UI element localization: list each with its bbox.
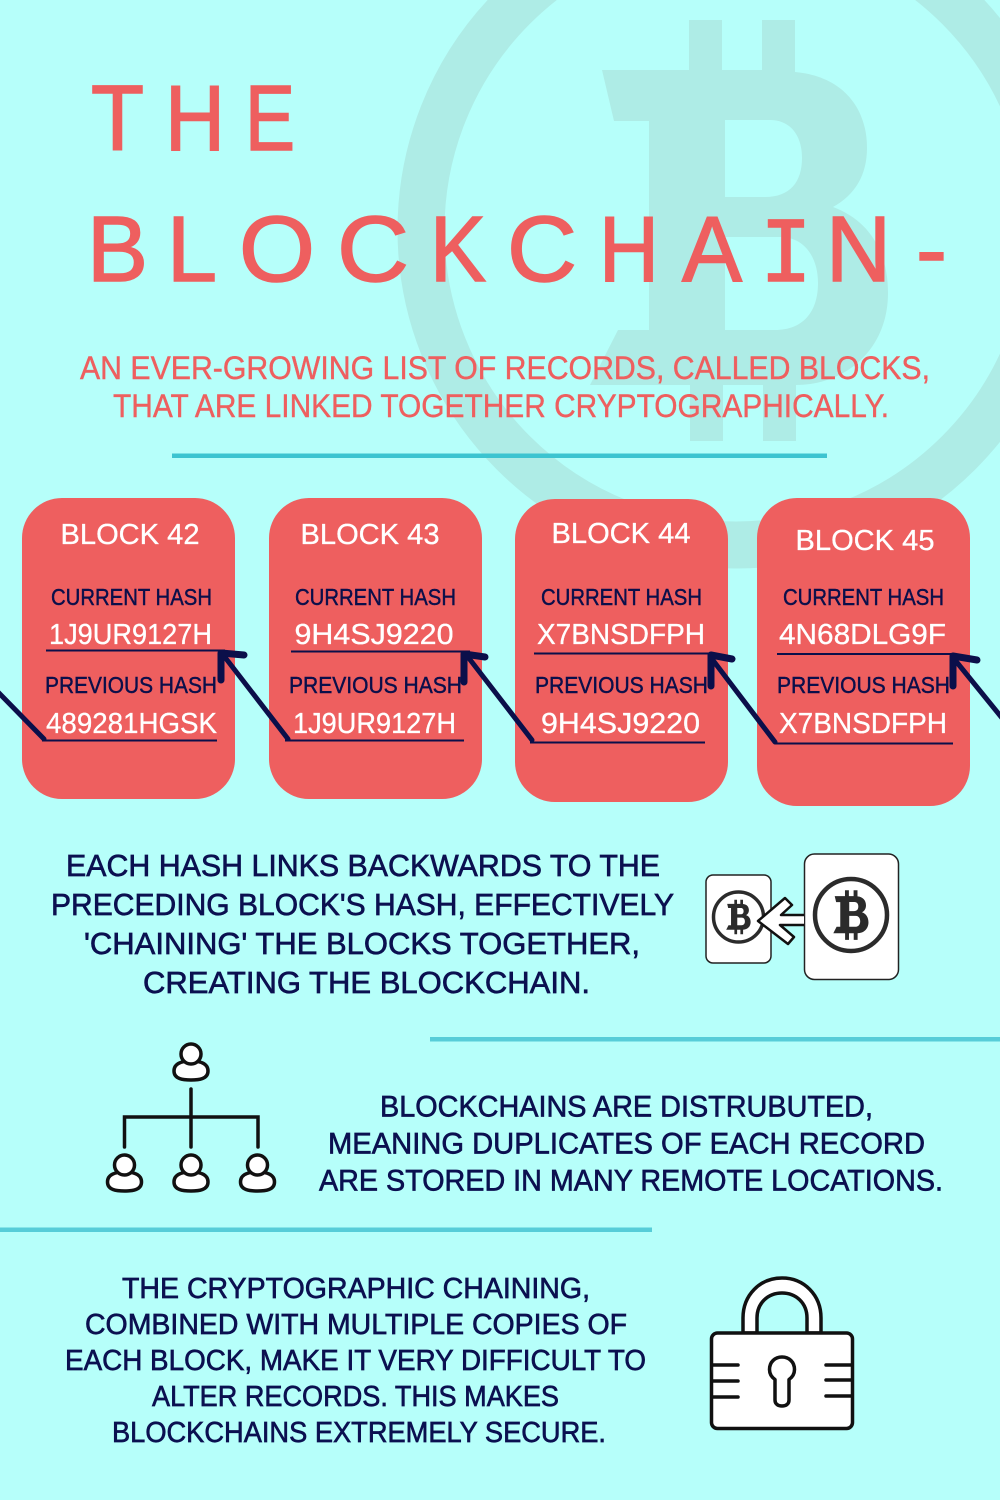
title: - [916,197,947,301]
panel: block 45: CURRENT HASH [783,584,944,610]
title: C [507,197,577,301]
text block: distributed: MEANING DUPLICATES OF EACH RECORD [328,1128,925,1160]
title: O [239,197,315,301]
panel: block 44 [515,499,728,802]
title: I [760,204,812,309]
panel: block 43: BLOCK 43 [300,519,440,551]
text block: security: COMBINED WITH MULTIPLE COPIES OF [85,1309,627,1341]
text block: hash linking: CREATING THE BLOCKCHAIN. [143,965,590,1000]
arrow: block 45 to block 44 [711,655,775,742]
panel: block 42: CURRENT HASH [51,584,212,610]
icon: distributed network [108,1044,274,1191]
person right [240,1155,274,1191]
panel: block 43: CURRENT HASH [295,584,456,610]
person middle [174,1155,208,1191]
subtitle: AN EVER-GROWING LIST OF RECORDS, CALLED BLOCKS, [80,350,930,386]
title: A [682,197,742,301]
icon: bitcoin watermark [421,0,1000,545]
arrow: block 44 to block 43 [464,654,532,740]
title [87,66,947,309]
panel: block 42: 489281HGSK [46,708,218,740]
text block: security [65,1273,646,1449]
subtitle: THAT ARE LINKED TOGETHER CRYPTOGRAPHICALLY. [113,388,889,424]
small bitcoin card [706,875,771,963]
large bitcoin card [804,854,898,980]
text block: security: EACH BLOCK, MAKE IT VERY DIFFICULT TO [65,1345,646,1377]
icon: padlock [712,1278,852,1428]
panel: block 42 [22,498,235,799]
panel: block 44: CURRENT HASH [541,584,702,610]
panel: block 44: X7BNSDFPH [537,619,705,651]
arrow: block 42 off-page [0,692,44,739]
text block: distributed [319,1090,943,1198]
title: N [826,197,891,301]
text block: security: BLOCKCHAINS EXTREMELY SECURE. [112,1417,606,1449]
panel: block 43: 1J9UR9127H [293,708,456,740]
title: B [87,197,148,301]
text block: hash linking: 'CHAINING' THE BLOCKS TOGETHER, [84,926,640,961]
panel: block 45: X7BNSDFPH [779,708,947,740]
title: K [430,197,486,301]
text block: hash linking [51,848,674,1000]
panel: block 44: PREVIOUS HASH [535,672,708,698]
panel: block 43: 9H4SJ9220 [294,619,454,651]
title: L [167,197,217,301]
panel: block 45 [757,498,970,806]
title: C [337,197,409,301]
panel: block 44: BLOCK 44 [552,518,690,550]
panel: block 45: 4N68DLG9F [779,619,946,651]
text block: hash linking: PRECEDING BLOCK'S HASH, EFFECTIVELY [51,887,674,922]
text block: distributed: BLOCKCHAINS ARE DISTRUBUTED, [380,1090,873,1124]
text block: hash linking: EACH HASH LINKS BACKWARDS TO THE [66,848,660,883]
panel: block 42: PREVIOUS HASH [45,672,217,698]
panel: block 45: PREVIOUS HASH [777,672,950,698]
subtitle [80,350,930,424]
icon: bitcoin cards with arrow [706,854,898,980]
arrow: off-page to block 45 [953,656,1000,718]
title: E [245,66,295,170]
panel: block 44: 9H4SJ9220 [541,708,700,740]
arrow: block 43 to block 42 [221,653,288,739]
text block: distributed: ARE STORED IN MANY REMOTE LOCATIONS. [319,1164,943,1198]
title: T [91,66,144,170]
panel: block 45: BLOCK 45 [796,525,934,557]
title: H [165,66,225,170]
text block: security: ALTER RECORDS. THIS MAKES [152,1381,559,1413]
panel: block 42: 1J9UR9127H [49,619,212,651]
text block: security: THE CRYPTOGRAPHIC CHAINING, [122,1273,590,1305]
panel: block 43: PREVIOUS HASH [289,672,462,698]
person left [108,1155,142,1191]
title: H [599,197,659,301]
panel: block 42: BLOCK 42 [60,519,200,551]
arrow between cards [758,898,804,944]
panel: block 43 [269,498,482,799]
person top [174,1044,208,1080]
